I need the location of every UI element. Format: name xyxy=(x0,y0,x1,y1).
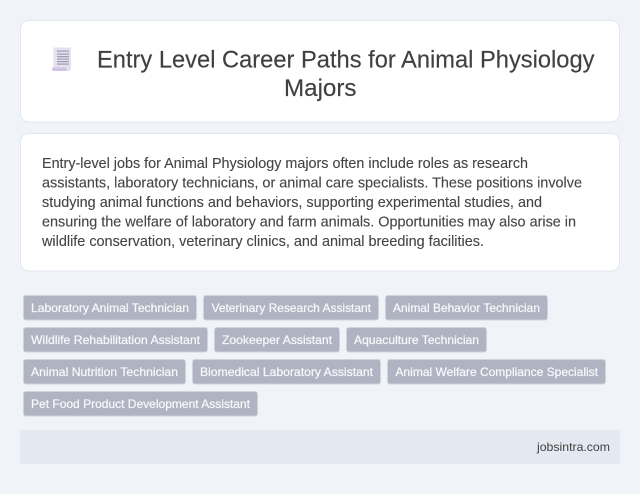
text block: description: assistants, laboratory technicians, or animal care specialists. These positions involve xyxy=(42,176,582,192)
tag: Aquaculture Technician: Aquaculture Technician xyxy=(354,333,479,347)
text block: description xyxy=(41,156,582,250)
tag: Animal Behavior Technician xyxy=(386,296,548,320)
tag: Pet Food Product Development Assistant xyxy=(24,392,258,416)
tag: Animal Behavior Technician: Animal Behavior Technician xyxy=(393,301,540,315)
tag: Veterinary Research Assistant: Veterinary Research Assistant xyxy=(212,301,372,315)
tag: Animal Nutrition Technician: Animal Nutrition Technician xyxy=(31,365,178,379)
tag: Animal Welfare Compliance Specialist xyxy=(388,360,606,384)
icon: paper scroll xyxy=(52,48,71,71)
tag: Laboratory Animal Technician: Laboratory Animal Technician xyxy=(31,301,189,315)
tag: Zookeeper Assistant: Zookeeper Assistant xyxy=(222,333,333,347)
text block: description: studying animal functions and behaviors, supporting experimental studies, and xyxy=(42,195,542,211)
tag list xyxy=(24,296,606,416)
tag: Wildlife Rehabilitation Assistant: Wildlife Rehabilitation Assistant xyxy=(31,333,201,347)
text block: description: wildlife conservation, veterinary clinics, and animal breeding facilities. xyxy=(41,234,484,250)
footer source text: jobsintra.com xyxy=(536,440,610,454)
title: Entry Level Career Paths for Animal Physiology xyxy=(97,46,595,74)
tag: Animal Nutrition Technician xyxy=(24,360,186,384)
tag: Veterinary Research Assistant xyxy=(204,296,378,320)
panel: title card xyxy=(20,20,620,122)
title xyxy=(97,46,595,102)
tag: Pet Food Product Development Assistant: Pet Food Product Development Assistant xyxy=(31,397,251,411)
footer bar xyxy=(20,430,620,464)
tag: Biomedical Laboratory Assistant: Biomedical Laboratory Assistant xyxy=(200,365,374,379)
tag: Animal Welfare Compliance Specialist: Animal Welfare Compliance Specialist xyxy=(396,365,599,379)
text block: description: Entry-level jobs for Animal Physiology majors often include roles as research xyxy=(42,156,528,172)
tag: Biomedical Laboratory Assistant xyxy=(192,360,380,384)
panel: description card xyxy=(20,134,620,271)
text block: description: ensuring the welfare of laboratory and farm animals. Opportunities may also arise in xyxy=(42,214,576,230)
tag: Laboratory Animal Technician xyxy=(24,296,196,320)
tag: Wildlife Rehabilitation Assistant xyxy=(24,328,208,352)
title: Majors xyxy=(284,75,356,102)
tag: Aquaculture Technician xyxy=(346,328,486,352)
tag: Zookeeper Assistant xyxy=(214,328,340,352)
